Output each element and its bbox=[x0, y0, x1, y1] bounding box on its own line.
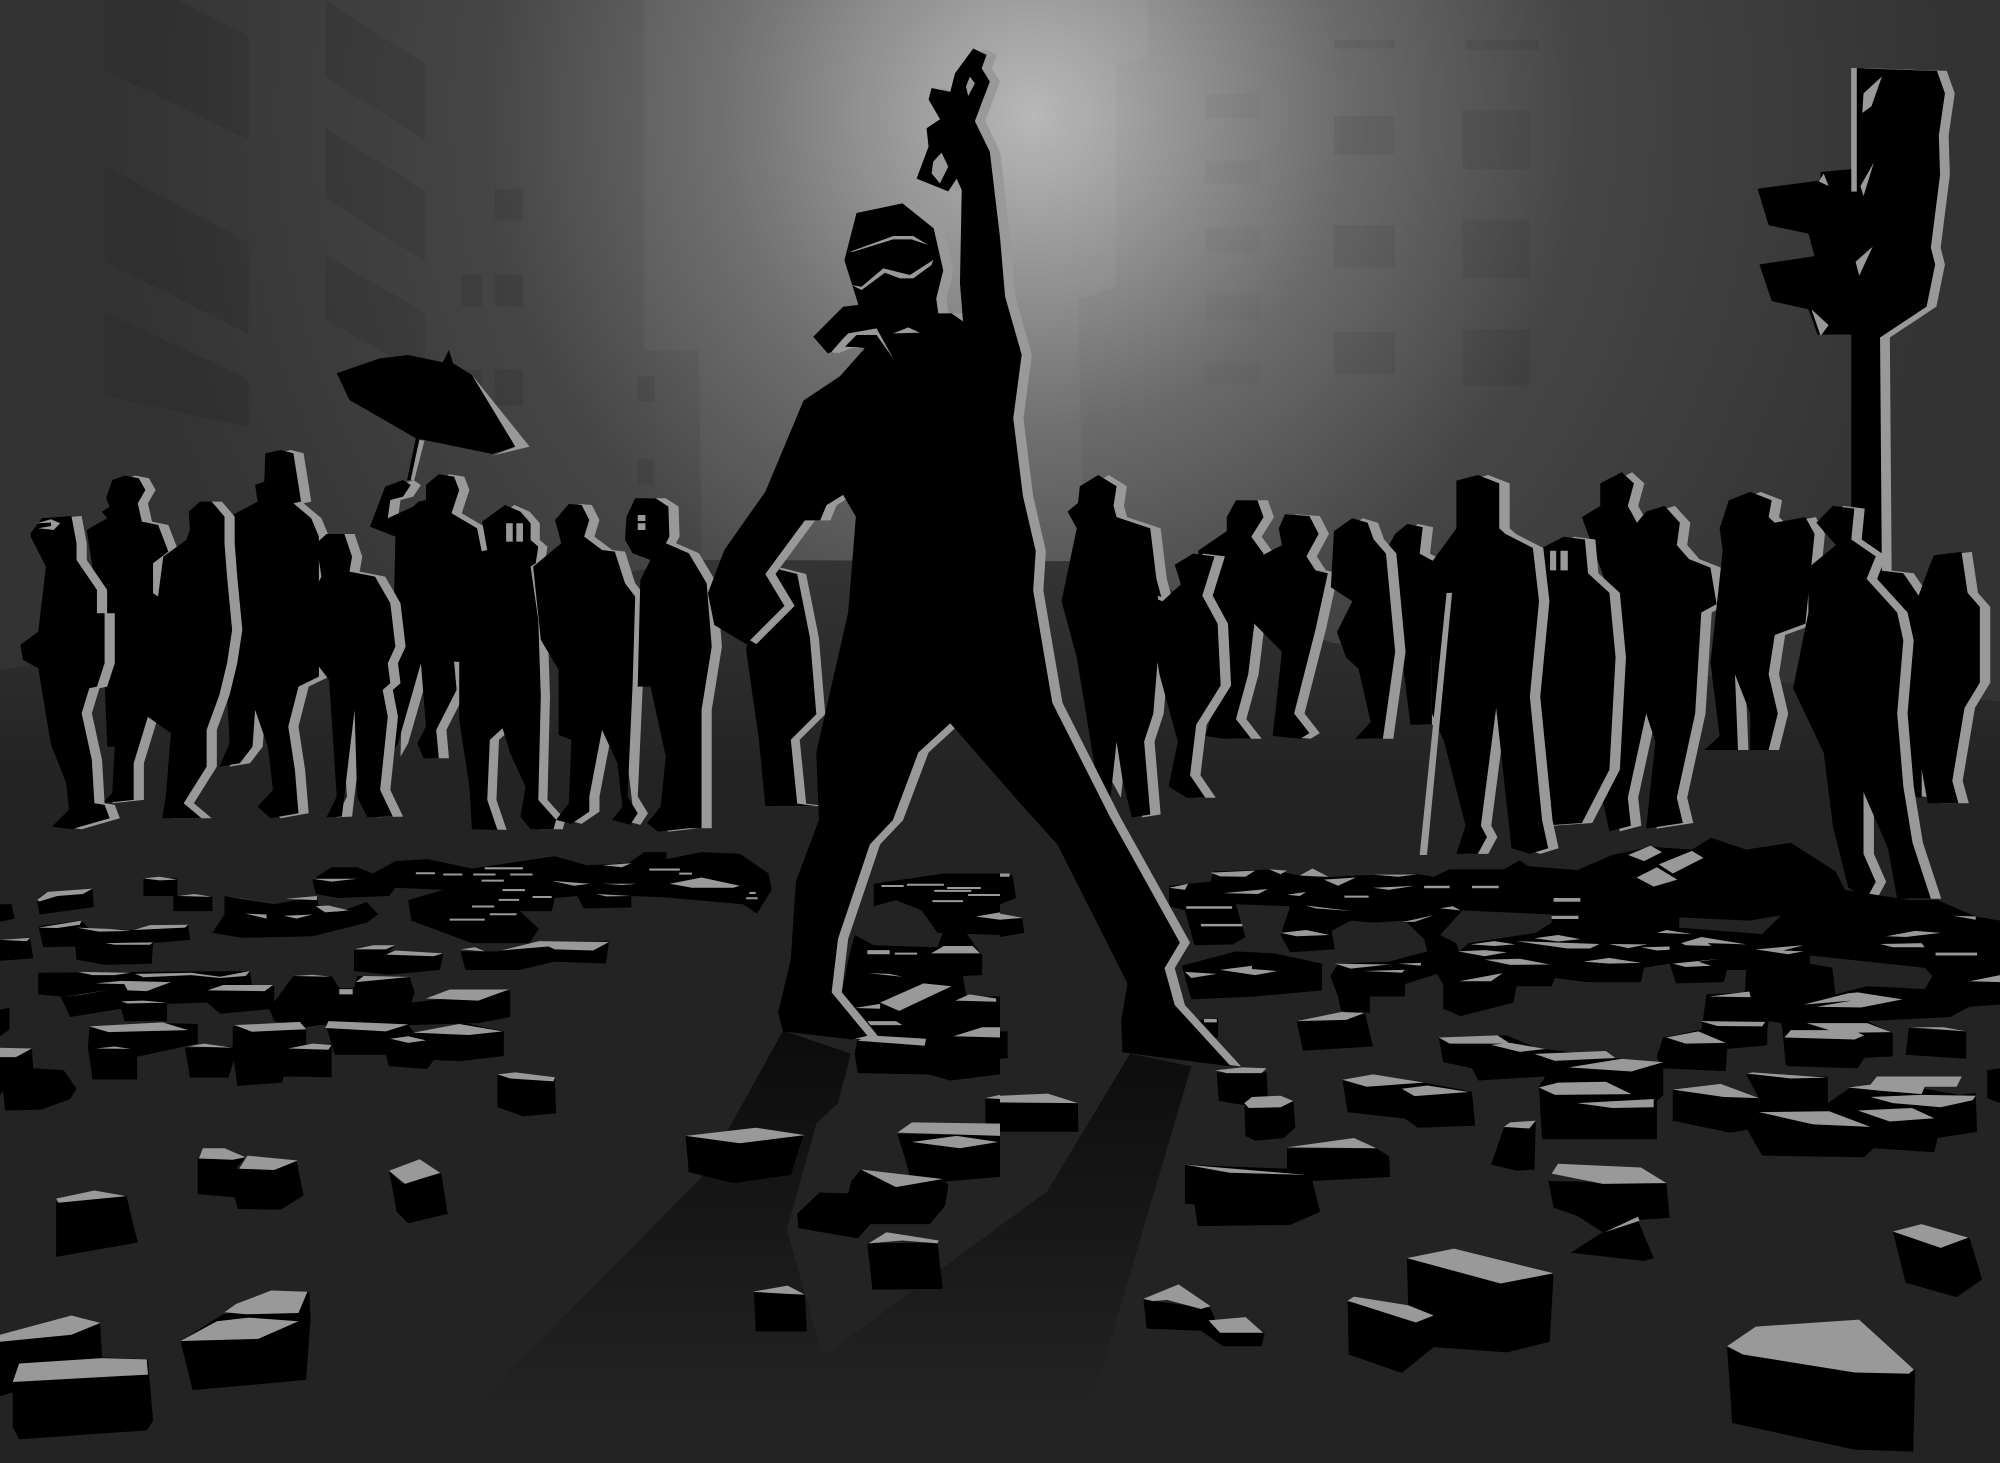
umbrella bbox=[337, 350, 530, 480]
traffic light bbox=[1758, 68, 1955, 573]
left crowd with umbrella bbox=[20, 350, 722, 832]
long shadow of the central figure bbox=[434, 1031, 1191, 1463]
gas mask and hand highlights bbox=[832, 77, 975, 358]
rubble: left field of stones bbox=[0, 852, 1000, 1439]
woman behind the central figure bbox=[746, 568, 825, 806]
street surface bbox=[0, 560, 2000, 1463]
rubble: right field of stones bbox=[1000, 838, 2000, 1452]
right crowd bbox=[1061, 472, 1990, 899]
buildings in the fog bbox=[105, 0, 1539, 561]
central figure in gas mask with raised fist bbox=[708, 48, 1241, 1066]
